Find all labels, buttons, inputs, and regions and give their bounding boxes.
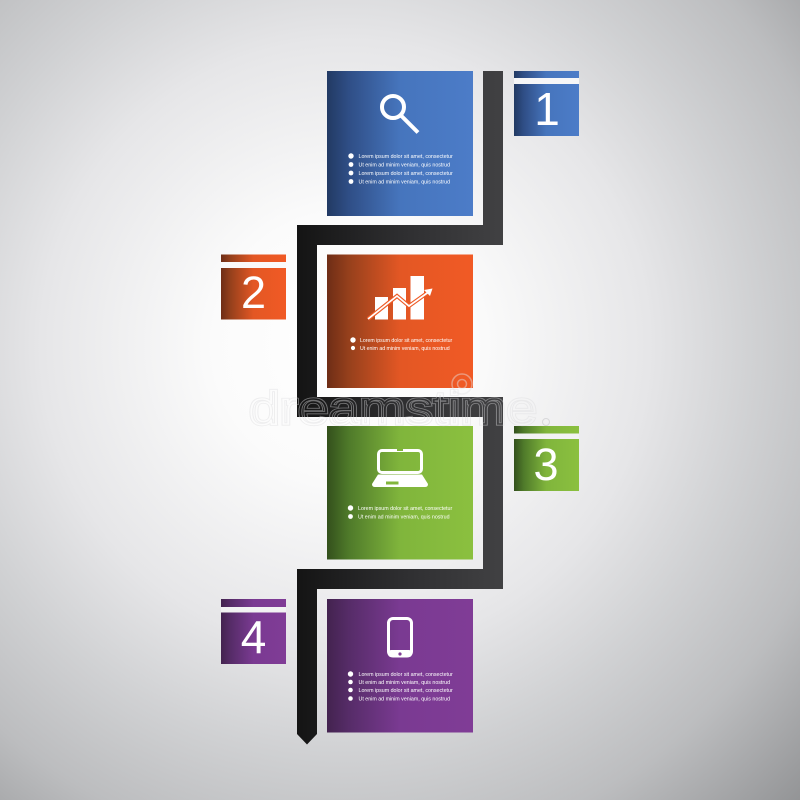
timeline connector line: [297, 71, 503, 744]
step 3 text list: Ut enim ad minim veniam, quis nostrud: [358, 514, 450, 520]
number badge 1: [514, 71, 579, 136]
step 4 text list: Lorem ipsum dolor sit amet, consectetur: [358, 688, 453, 694]
step 1 text list: [348, 153, 453, 186]
number badge 4: [221, 599, 286, 664]
number badge 3: 3: [533, 439, 559, 490]
number badge 1: 1: [534, 83, 560, 135]
step 4 text list: Lorem ipsum dolor sit amet, consectetur: [358, 672, 453, 678]
panel: step 1: [327, 71, 473, 216]
step 1 text list: Ut enim ad minim veniam, quis nostrud: [358, 162, 450, 168]
step 4 text list: [348, 671, 453, 702]
panel: step 2: [327, 254, 473, 388]
step 3 text list: [348, 505, 452, 520]
step 2 text list: Ut enim ad minim veniam, quis nostrud: [360, 346, 450, 352]
infographic: [221, 71, 579, 744]
icon: laptop: [372, 448, 428, 487]
watermark: [250, 373, 550, 426]
number badge 2: [221, 254, 286, 320]
step 1 text list: Ut enim ad minim veniam, quis nostrud: [358, 180, 450, 186]
step 4 text list: Ut enim ad minim veniam, quis nostrud: [358, 696, 450, 702]
icon: rising bar chart: [368, 276, 432, 320]
step 3 text list: Lorem ipsum dolor sit amet, consectetur: [358, 506, 452, 512]
step 2 text list: [350, 337, 453, 352]
panel: step 3: [327, 426, 473, 560]
step 1 text list: Lorem ipsum dolor sit amet, consectetur: [358, 171, 453, 177]
panel: step 4: [327, 599, 473, 732]
step 2 text list: Lorem ipsum dolor sit amet, consectetur: [360, 338, 453, 344]
step 4 text list: Ut enim ad minim veniam, quis nostrud: [358, 680, 450, 686]
number badge 4: 4: [241, 611, 266, 663]
step 1 text list: Lorem ipsum dolor sit amet, consectetur: [358, 154, 453, 160]
number badge 2: 2: [241, 267, 266, 318]
icon: smartphone: [388, 618, 412, 657]
icon: magnifying glass: [382, 96, 418, 132]
number badge 3: [514, 426, 579, 491]
